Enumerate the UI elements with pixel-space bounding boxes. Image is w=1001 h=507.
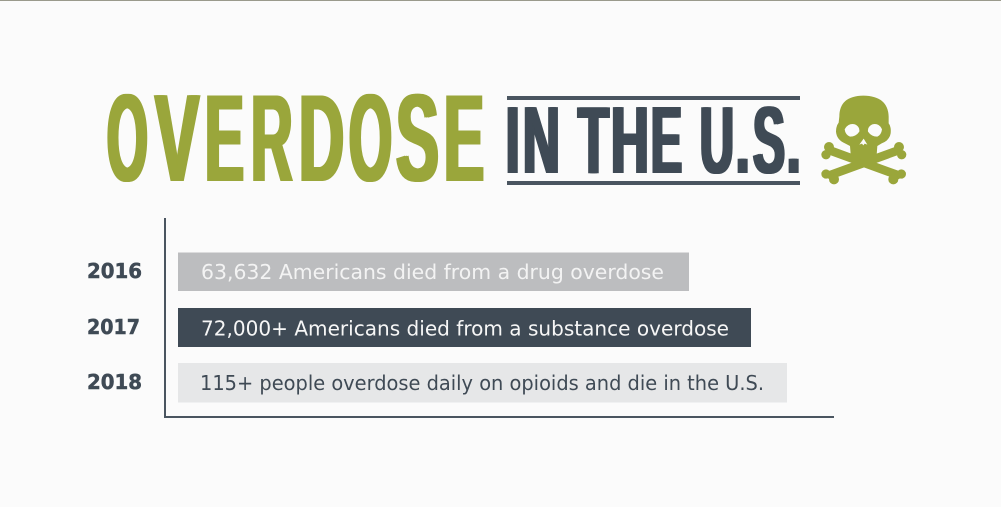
heading: in the U.S.	[506, 86, 801, 194]
heading: in the U.S.: T	[578, 86, 608, 194]
heading: overdose: E	[205, 70, 244, 208]
chart axes	[165, 218, 834, 417]
row: 2018: 115+ people overdose daily on opioids and die in the U.S.	[200, 371, 764, 395]
heading: in the U.S.: N	[523, 86, 560, 194]
heading: in the U.S.: .	[736, 86, 750, 194]
row: 2016	[87, 252, 689, 291]
heading: overdose: O	[106, 70, 147, 208]
row: 2016: 63,632 Americans died from a drug overdose	[201, 260, 664, 284]
heading: in the U.S.: E	[650, 86, 681, 194]
heading: overdose: V	[155, 70, 199, 208]
heading: overdose: S	[396, 70, 439, 208]
row: 2018	[87, 363, 787, 402]
row: 2016: 2016	[87, 259, 142, 283]
heading: overdose: R	[251, 70, 292, 208]
heading: in the U.S.: U	[700, 86, 734, 194]
row: 2017: 72,000+ Americans died from a substance overdose	[201, 316, 729, 340]
heading: in the U.S.: S	[753, 86, 785, 194]
icon: skull and crossbones	[821, 96, 906, 184]
row: 2017: 2017	[87, 315, 140, 339]
row: 2018: 2018	[87, 370, 142, 394]
row: 2017	[87, 308, 751, 347]
heading: overdose	[106, 70, 484, 208]
chart: overdose timeline	[87, 218, 834, 417]
heading: in the U.S.: H	[611, 86, 649, 194]
heading: in the U.S.: .	[787, 86, 801, 194]
heading: overdose: O	[349, 70, 392, 208]
heading: overdose: D	[298, 70, 344, 208]
heading: in the U.S.: I	[506, 86, 520, 194]
heading: overdose: E	[444, 70, 484, 208]
